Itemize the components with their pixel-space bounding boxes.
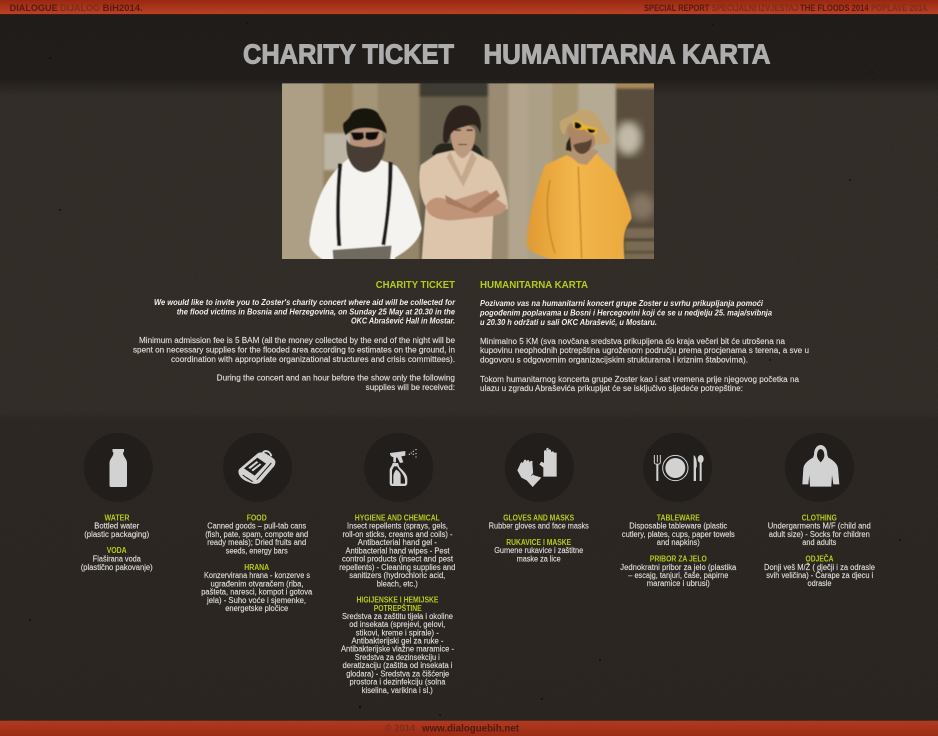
panel: English intro [133, 280, 456, 392]
panel: Bosnian intro [479, 280, 809, 393]
text: hygiene: Antibakterijske vlažne maramice - [341, 645, 454, 654]
text: hygiene: glodara) - Sredstva za čišćenje [346, 669, 450, 678]
text: gloves: RUKAVICE I MASKE [506, 538, 572, 547]
text: food: Konzervirana hrana - konzerve s [204, 571, 310, 580]
text: gloves [489, 513, 589, 564]
text: hygiene: POTREPŠTINE [374, 604, 422, 613]
header right: report name: POPLAVE 2014. [871, 3, 929, 13]
text: gloves: GLOVES AND MASKS [503, 513, 575, 522]
text: food [201, 513, 313, 613]
icon: rubber gloves [505, 433, 574, 502]
icon: spray bottle [364, 433, 433, 502]
text: hygiene: kiselina, varikina i sl.) [362, 686, 433, 695]
text: hygiene: control products (insect and pest [342, 554, 454, 564]
icon: hoodie [785, 433, 854, 502]
text: hygiene: HYGIENE AND CHEMICAL [355, 513, 440, 522]
header left: publication name: DIJALOG [60, 3, 100, 13]
text: hygiene: Insect repellents (sprays, gels, [347, 522, 448, 531]
main title: HUMANITARNA KARTA [484, 38, 770, 70]
text: tableware: and napkins) [657, 538, 700, 547]
text: water: (plastic packaging) [84, 530, 150, 539]
text: clothing: adult size) - Socks for children [769, 530, 870, 539]
text: hygiene: Antibacterial hand wipes - Pest [346, 546, 450, 556]
text: hygiene [339, 513, 455, 695]
heading: charity ticket: CHARITY TICKET [376, 280, 455, 291]
text: hygiene: Antibacterial hand gel - [358, 538, 437, 547]
header left: publication name: BiH2014. [103, 3, 143, 13]
text: water: VODA [107, 546, 127, 555]
text: clothing: svih veličina) - Čarape za djecu i [766, 571, 873, 580]
text: hygiene: od insekata (sprejevi, gelovi, [349, 620, 445, 629]
text: gloves: maske za lice [517, 554, 561, 564]
band photo [280, 80, 657, 262]
footer bar [0, 721, 938, 736]
header right: report name [644, 2, 929, 13]
icon: plate and cutlery [643, 433, 712, 502]
text: hygiene: stikovi, kreme i spirale) - [356, 628, 439, 637]
text: hygiene: deratizaciju (zaštita od insekata i [342, 661, 453, 670]
column: tableware [620, 433, 737, 588]
text block: English invitation: We would like to invite you to Zoster's charity concert where aid will be collected for [154, 298, 456, 307]
text: food: HRANA [244, 563, 269, 572]
text: hygiene: prostora i dezinfekciju (solna [350, 678, 446, 686]
text block: Bosnian invitation: Pozivamo vas na humanitarni koncert grupe Zoster u svrhu prikupljanja pomoći [480, 299, 764, 308]
text: water [81, 513, 153, 572]
text: hygiene: roll-on sticks, creams and coils) - [342, 530, 453, 539]
icon: canned food [223, 433, 292, 502]
column: gloves [489, 433, 589, 564]
text: tableware [620, 513, 737, 588]
header right: report name: THE FLOODS 2014 [800, 3, 869, 13]
header left: publication name [10, 3, 143, 13]
text: clothing: Donji veš M/Ž ( dječji i za odrasle [764, 563, 876, 572]
man in beige shirt with crossed arms [419, 105, 508, 260]
text: water: WATER [104, 513, 130, 522]
footer website: www.dialoguebih.net [421, 722, 519, 734]
text: food: energetske pločice [225, 604, 289, 613]
text block: Bosnian invitation: pogođenim poplavama u Bosni i Hercegovini koji će se u nedjelju 25. maja/svibnja [479, 308, 773, 318]
text: food: ugrađenim otvaračem (riba, [210, 579, 304, 588]
text: hygiene: Sredstva za dezinsekciju i [355, 653, 440, 662]
main title [243, 38, 770, 70]
text: hygiene: Sredstva za zaštitu tijela i okoline [342, 612, 454, 621]
text: tableware: cutlery, plates, cups, paper towels [622, 530, 735, 539]
text: tableware: Disposable tableware (plastic [629, 522, 727, 531]
text block: English invitation: the flood victims in Bosnia and Herzegovina, on Sunday 25 May at 20.30 in the [177, 308, 456, 317]
footer copyright: © 2014 [385, 722, 415, 734]
text: food: seeds, energy bars [226, 546, 288, 556]
column: food [201, 433, 313, 613]
man in hat and suspenders [309, 108, 422, 260]
heading: humanitarna karta: HUMANITARNA KARTA [480, 280, 588, 291]
text: hygiene: bleach, etc.) [377, 579, 418, 588]
text block: Bosnian invitation: Tokom humanitarnog koncerta grupe Zoster kao i sat vremena prije njegovog početka na [480, 375, 800, 384]
text block: English invitation: OKC Abrašević Hall in Mostar. [351, 317, 455, 326]
text: gloves: Rubber gloves and face masks [489, 522, 589, 531]
text: hygiene: HIGIJENSKE I HEMIJSKE [356, 596, 439, 604]
column: hygiene [339, 433, 455, 695]
text: tableware: maramice i ubrusi) [647, 579, 710, 588]
column: clothing [764, 433, 876, 588]
text block: English invitation: coordination with appropriate organizational structures and crisis committees). [171, 355, 455, 364]
text block: Bosnian invitation: Minimalno 5 KM (sva novčana sredstva prikupljena do kraja večeri bit će utrošena na [480, 337, 786, 346]
text: food: ready meals); Dried fruits and [207, 538, 306, 547]
man in yellow raincoat and bucket hat [527, 110, 632, 260]
text: tableware: PRIBOR ZA JELO [650, 554, 707, 564]
text: food: (fish, pate, spam, compote and [205, 530, 308, 539]
main title: CHARITY TICKET [243, 38, 454, 70]
text: water: (plastično pakovanje) [81, 563, 153, 572]
text: clothing: ODJEČA [806, 554, 834, 564]
text: clothing: CLOTHING [802, 513, 837, 522]
text block: English invitation: supplies will be received: [366, 383, 455, 392]
text: hygiene: repellents) - Cleaning supplies and [339, 563, 455, 572]
header right: report name: SPECIAL REPORT [644, 3, 710, 13]
top header bar [0, 0, 938, 15]
text block: Bosnian invitation: u 20.30 h održati u sali OKC Abrašević, u Mostaru. [480, 318, 657, 327]
text: clothing: and adults [802, 538, 836, 547]
text block: Bosnian invitation: ulazu u zgradu Abraševića prikupljat će se isključivo sljedeće potrepštine: [480, 384, 743, 393]
text block: English invitation: During the concert and an hour before the show only the following [217, 374, 455, 383]
header left: publication name: DIALOGUE [10, 3, 58, 13]
text block: Bosnian invitation: dogovoru s odgovornim organizacijskim strukturama i kriznim štabovima). [480, 356, 748, 364]
text block: English invitation [133, 298, 456, 392]
text: water: Bottled water [94, 522, 140, 531]
text: water: Flaširana voda [93, 554, 141, 564]
text: clothing [764, 513, 876, 588]
text block: Bosnian invitation: kupovinu neophodnih potrepština ugroženom području prema procjenama s terena, a sve u [480, 346, 809, 355]
text: hygiene: Antibakterijski gel za ruke - [352, 636, 444, 645]
text: food: pašteta, naresci, kompot i gotova [201, 588, 313, 597]
text block: English invitation: spent on necessary supplies for the flooded area according to estimates on the ground, in [133, 346, 455, 354]
header right: report name: SPECIJALNI IZVJEŠTAJ [712, 2, 798, 13]
text block: Bosnian invitation [479, 299, 809, 393]
text: tableware: TABLEWARE [657, 513, 700, 522]
text: tableware: – escajg, tanjuri, čaše, papirne [628, 571, 729, 580]
text: hygiene: sanitizers (hydrochloric acid, [349, 571, 445, 580]
text: food: Canned goods – pull-tab cans [207, 522, 306, 531]
column: water [81, 433, 153, 572]
text: food: FOOD [247, 513, 267, 522]
text: clothing: odrasle [808, 579, 832, 588]
text: clothing: Undergarments M/F (child and [768, 522, 871, 531]
text: gloves: Gumene rukavice i zaštitne [494, 546, 584, 555]
text: food: jela) - Suho voće i sjemenke, [206, 596, 306, 605]
text block: English invitation: Minimum admission fee is 5 BAM (all the money collected by the end of the night will be [139, 336, 456, 345]
icon: water bottle [84, 433, 153, 502]
text: tableware: Jednokratni pribor za jelo (plastika [620, 563, 737, 572]
